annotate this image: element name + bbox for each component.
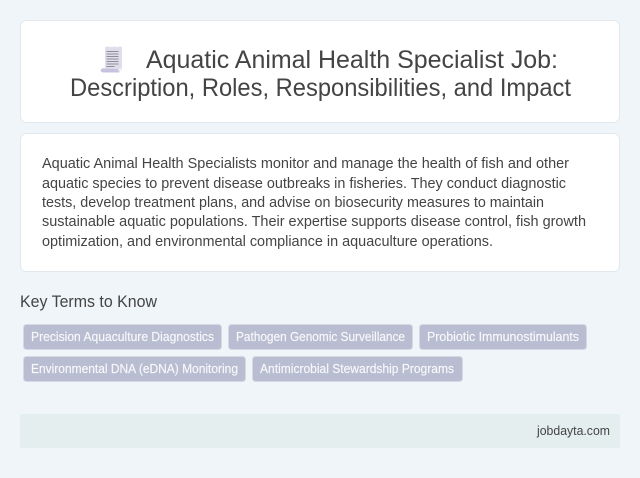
title line 1: Aquatic Animal Health Specialist Job: (146, 46, 558, 74)
panel: title card (20, 20, 620, 122)
chip: probiotic immunostimulants (420, 324, 586, 350)
chip: precision aquaculture diagnostics (24, 324, 222, 350)
description text: optimization, and environmental compliance in aquaculture operations. (42, 234, 493, 250)
chip: pathogen genomic surveillance: Pathogen Genomic Surveillance (236, 330, 405, 344)
chip: precision aquaculture diagnostics: Precision Aquaculture Diagnostics (31, 330, 214, 344)
icon: document scroll (100, 46, 122, 72)
footer bar (20, 414, 620, 448)
panel: key term chips (24, 324, 586, 382)
chip: antimicrobial stewardship programs (252, 356, 462, 382)
description text: tests, develop treatment plans, and advise on biosecurity measures to maintain (42, 195, 544, 211)
title line 2: Description, Roles, Responsibilities, and Impact (70, 74, 571, 102)
description text: sustainable aquatic populations. Their expertise supports disease control, fish growth (42, 214, 586, 230)
chip: antimicrobial stewardship programs: Antimicrobial Stewardship Programs (260, 362, 454, 376)
description text (42, 156, 586, 250)
chip: environmental dna monitoring: Environmental DNA (eDNA) Monitoring (31, 362, 238, 376)
chip: pathogen genomic surveillance (228, 324, 412, 350)
chip: probiotic immunostimulants: Probiotic Immunostimulants (427, 330, 579, 344)
footer site name: jobdayta.com (536, 424, 610, 438)
chip: environmental dna monitoring (24, 356, 246, 382)
description text: aquatic species to prevent disease outbreaks in fisheries. They conduct diagnostic (42, 176, 566, 192)
panel: description card (20, 134, 620, 272)
description text: Aquatic Animal Health Specialists monitor and manage the health of fish and other (42, 156, 569, 172)
heading: key terms: Key Terms to Know (20, 293, 157, 311)
